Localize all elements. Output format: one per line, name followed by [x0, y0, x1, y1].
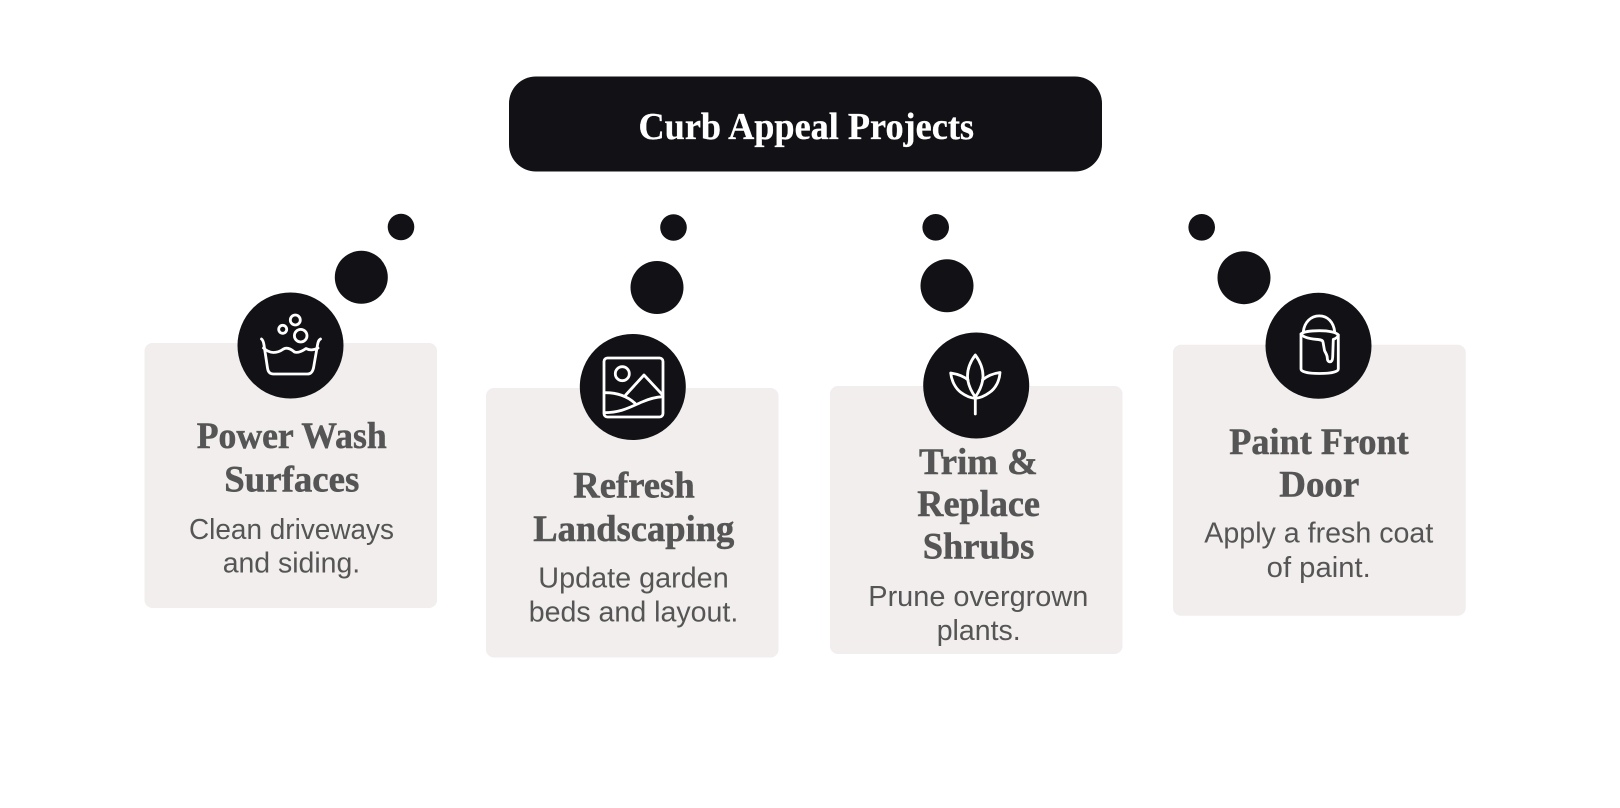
description: Apply a fresh coat: [1204, 518, 1433, 550]
description: [868, 581, 1088, 647]
heading: [917, 442, 1040, 568]
icon: landscape picture: [604, 358, 663, 417]
description: of paint.: [1267, 552, 1371, 584]
heading: Surfaces: [224, 460, 359, 501]
panel: power wash surfaces: [144, 214, 437, 608]
heading: Replace: [917, 484, 1040, 525]
connector dots: [335, 214, 414, 304]
icon: paint bucket: [1301, 316, 1338, 374]
heading: Landscaping: [533, 509, 735, 550]
icon circle: [923, 332, 1029, 438]
heading: Door: [1279, 465, 1359, 506]
heading: Trim &: [919, 442, 1038, 483]
description: [529, 563, 738, 629]
heading: Shrubs: [923, 527, 1034, 568]
heading: Refresh: [573, 466, 695, 507]
description: Prune overgrown: [868, 581, 1088, 613]
icon: wash basin with bubbles: [262, 315, 320, 374]
description: beds and layout.: [529, 597, 738, 629]
card background: [1173, 345, 1466, 616]
description: and siding.: [223, 548, 360, 580]
title banner: [509, 76, 1102, 172]
heading: Paint Front: [1229, 422, 1409, 463]
icon circle: [238, 292, 344, 398]
card background: [486, 388, 778, 658]
connector dots: [920, 214, 974, 312]
card background: [144, 343, 437, 608]
heading: Power Wash: [197, 416, 387, 457]
connector dots: [630, 214, 687, 314]
heading: [1229, 422, 1409, 506]
description: Update garden: [538, 563, 729, 595]
description: Clean driveways: [189, 514, 394, 546]
connector dots: [1188, 214, 1270, 304]
panel: trim and replace shrubs: [830, 214, 1122, 654]
icon circle: [580, 334, 686, 440]
card background: [830, 386, 1122, 654]
title: Curb Appeal Projects: [638, 106, 974, 148]
heading: [533, 466, 735, 550]
panel: paint front door: [1173, 214, 1466, 616]
description: plants.: [937, 615, 1021, 647]
icon circle: [1266, 293, 1372, 399]
description: [1204, 518, 1433, 584]
heading: [197, 416, 387, 501]
description: [189, 514, 394, 580]
icon: three-leaf plant: [951, 355, 1000, 414]
panel: refresh landscaping: [486, 214, 778, 657]
